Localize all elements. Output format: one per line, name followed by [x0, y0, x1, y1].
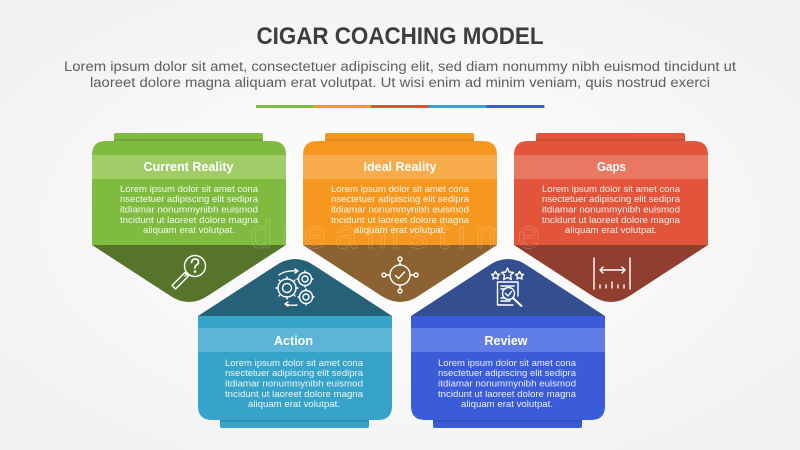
- heading: action: Action: [274, 333, 313, 348]
- panel: action: [198, 259, 392, 428]
- text block: gaps: tncidunt ut laoreet dolore magna: [542, 215, 681, 226]
- icon: magnifier with question mark: [172, 256, 206, 289]
- text block: gaps: aliquam erat volutpat.: [565, 225, 657, 236]
- heading: review: Review: [484, 333, 528, 348]
- text block: review: Lorem ipsum dolor sit amet cona: [438, 358, 577, 369]
- text block: action: [225, 358, 364, 410]
- text block: gaps: itdiamar nonummynibh euismod: [542, 204, 680, 216]
- text block: ideal reality: itdiamar nonummynibh euismod: [331, 204, 469, 216]
- intro paragraph: Lorem ipsum dolor sit amet, consectetuer adipiscing elit, sed diam nonummy nibh euismod tincidunt ut: [64, 59, 736, 74]
- icon: measuring gap: [594, 258, 630, 289]
- watermark: dreamstime: [250, 213, 540, 257]
- text block: action: aliquam erat volutpat.: [248, 399, 340, 410]
- text block: ideal reality: aliquam erat volutpat.: [354, 225, 446, 236]
- text block: ideal reality: Lorem ipsum dolor sit amet cona: [331, 184, 470, 195]
- text block: current reality: Lorem ipsum dolor sit amet cona: [120, 184, 259, 195]
- panel: review: [411, 259, 605, 428]
- text block: review: itdiamar nonummynibh euismod: [438, 378, 576, 390]
- text block: gaps: nsectetuer adipiscing elit sedipra: [542, 194, 681, 205]
- panel: gaps: [514, 133, 708, 302]
- panel: current reality: [92, 133, 286, 302]
- icon: gears with arrows: [276, 269, 314, 306]
- text block: current reality: [120, 184, 259, 236]
- text block: current reality: tncidunt ut laoreet dolore magna: [120, 215, 259, 226]
- text block: gaps: Lorem ipsum dolor sit amet cona: [542, 184, 681, 195]
- text block: current reality: aliquam erat volutpat.: [143, 225, 235, 236]
- text block: action: itdiamar nonummynibh euismod: [225, 378, 363, 390]
- text block: action: nsectetuer adipiscing elit sedipra: [225, 368, 364, 379]
- text block: gaps: [542, 184, 681, 236]
- icon: rated document with magnifier: [492, 268, 524, 306]
- text block: review: [438, 358, 577, 410]
- panel: ideal reality: [303, 133, 497, 302]
- text block: ideal reality: nsectetuer adipiscing elit sedipra: [331, 194, 470, 205]
- intro paragraph: [64, 59, 736, 90]
- heading: ideal reality: Ideal Reality: [364, 159, 437, 174]
- text block: review: tncidunt ut laoreet dolore magna: [438, 389, 577, 400]
- colour divider: [256, 105, 544, 108]
- icon: connected check hub: [382, 257, 418, 293]
- heading: gaps: Gaps: [597, 159, 626, 174]
- title: CIGAR COACHING MODEL: [256, 23, 544, 50]
- text block: action: tncidunt ut laoreet dolore magna: [225, 389, 364, 400]
- text block: review: nsectetuer adipiscing elit sedipra: [438, 368, 577, 379]
- text block: current reality: itdiamar nonummynibh euismod: [120, 204, 258, 216]
- heading: current reality: Current Reality: [144, 159, 234, 174]
- text block: action: Lorem ipsum dolor sit amet cona: [225, 358, 364, 369]
- text block: current reality: nsectetuer adipiscing elit sedipra: [120, 194, 259, 205]
- text block: ideal reality: tncidunt ut laoreet dolore magna: [331, 215, 470, 226]
- text block: review: aliquam erat volutpat.: [461, 399, 553, 410]
- text block: ideal reality: [331, 184, 470, 236]
- intro paragraph: laoreet dolore magna aliquam erat volutpat. Ut wisi enim ad minim veniam, quis nostrud exerci: [90, 75, 710, 90]
